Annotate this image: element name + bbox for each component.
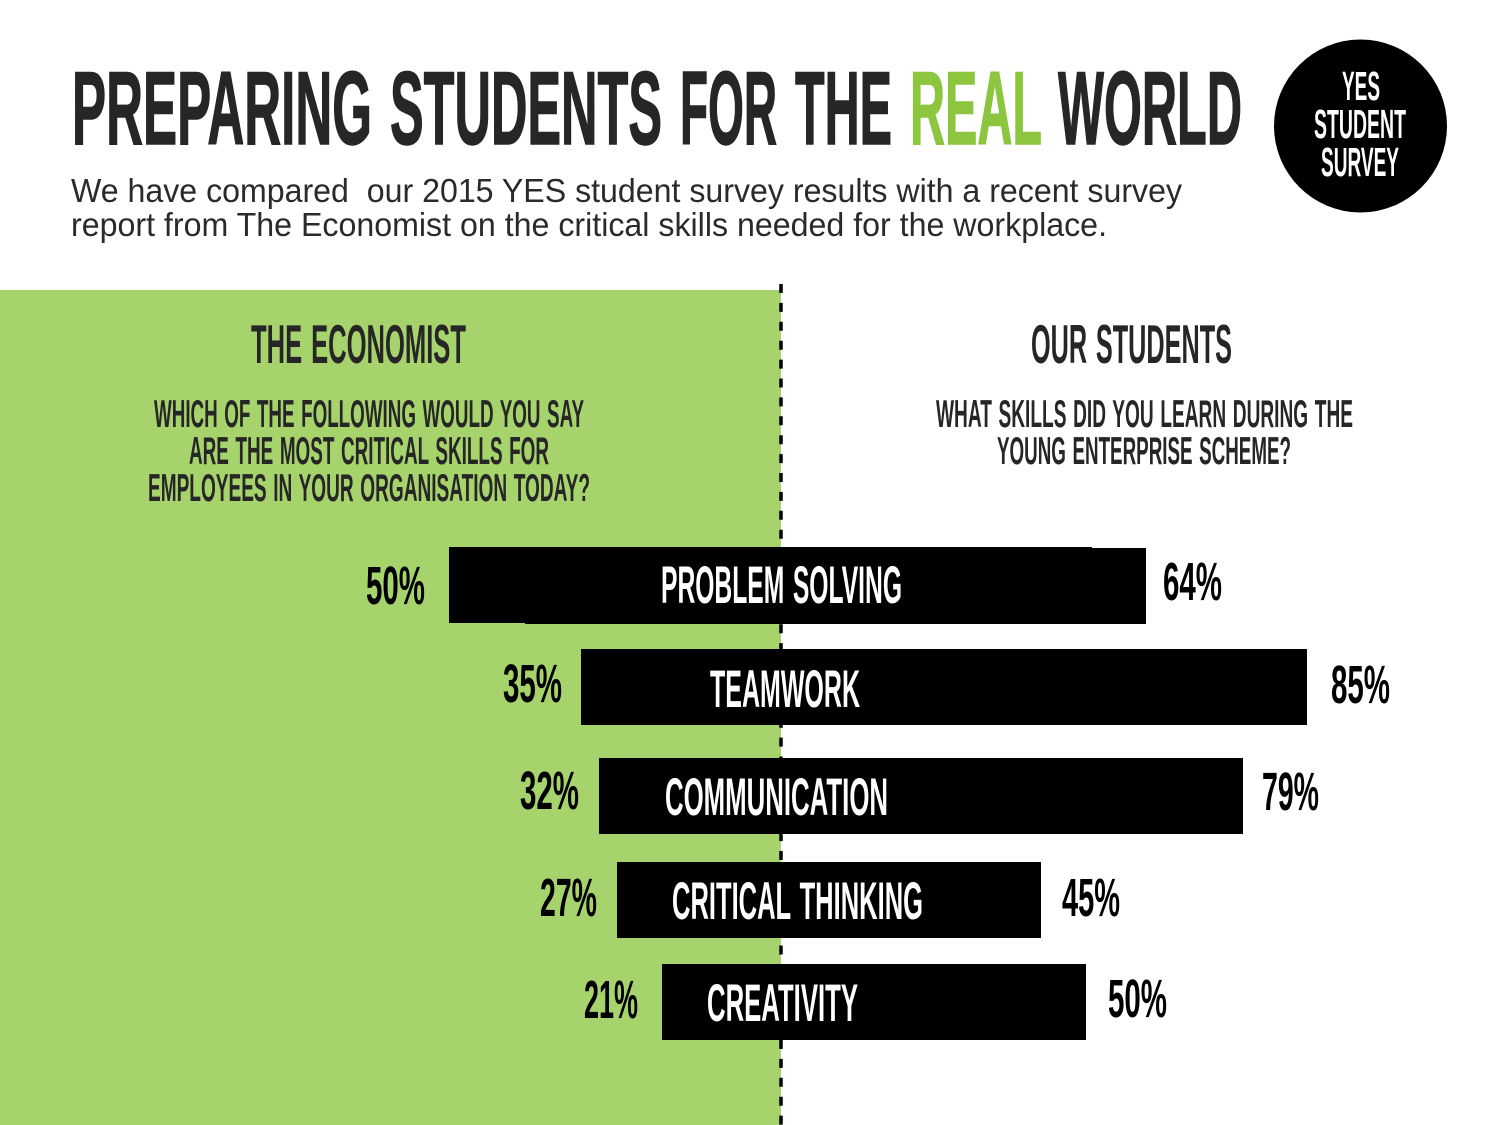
economist question: ARE THE MOST CRITICAL SKILLS FOR: [189, 430, 549, 473]
text: EMPLOYEES IN YOUR ORGANISATION TODAY?: [148, 467, 590, 510]
panel: the economist background: [0, 290, 781, 1125]
row: teamwork: 85%: [1331, 655, 1390, 715]
row: communication: 32%: [520, 761, 579, 821]
title: REAL: [910, 51, 1042, 167]
row: problem solving: PROBLEM SOLVING: [661, 556, 902, 615]
row: critical thinking: 45%: [1062, 868, 1120, 928]
row: communication: [520, 758, 1319, 834]
row: critical thinking: 27%: [540, 868, 597, 928]
row: teamwork: 35%: [503, 654, 562, 714]
title: PREPARING: [72, 51, 372, 167]
title: [72, 51, 1242, 167]
title: FOR: [680, 51, 777, 167]
badge: yes student survey: SURVEY: [1321, 139, 1399, 185]
bar chart: [366, 547, 1390, 1040]
row: creativity: 50%: [1108, 969, 1167, 1029]
row: creativity: 21%: [584, 970, 638, 1030]
economist question: [148, 393, 590, 510]
intro text: report from The Economist on the critical skills needed for the workplace.: [71, 206, 1107, 243]
badge: yes student survey: [1274, 40, 1447, 212]
intro text: [71, 172, 1182, 243]
text: OUR STUDENTS: [1031, 313, 1232, 375]
row: creativity: CREATIVITY: [707, 974, 858, 1033]
row: teamwork: [503, 649, 1390, 725]
row: problem solving: [366, 547, 1222, 624]
row: problem solving: 50%: [366, 556, 425, 616]
row: communication: COMMUNICATION: [665, 768, 888, 827]
intro text: We have compared our 2015 YES student survey results with a recent survey: [71, 172, 1182, 209]
text: WHICH OF THE FOLLOWING WOULD YOU SAY: [154, 393, 584, 436]
centre dashed divider: [779, 284, 783, 1125]
row: problem solving: 64%: [1163, 552, 1222, 612]
row: critical thinking: [540, 862, 1120, 938]
title: STUDENTS: [390, 51, 662, 167]
title: THE: [795, 51, 892, 167]
text: THE ECONOMIST: [251, 313, 466, 375]
row: teamwork: TEAMWORK: [710, 660, 860, 719]
badge: yes student survey: YES: [1342, 63, 1380, 109]
row: critical thinking: CRITICAL THINKING: [672, 872, 923, 931]
text: WORLD: [1058, 51, 1242, 167]
row: communication: 79%: [1262, 762, 1319, 822]
students question: [936, 393, 1353, 473]
row: creativity: [584, 964, 1167, 1040]
